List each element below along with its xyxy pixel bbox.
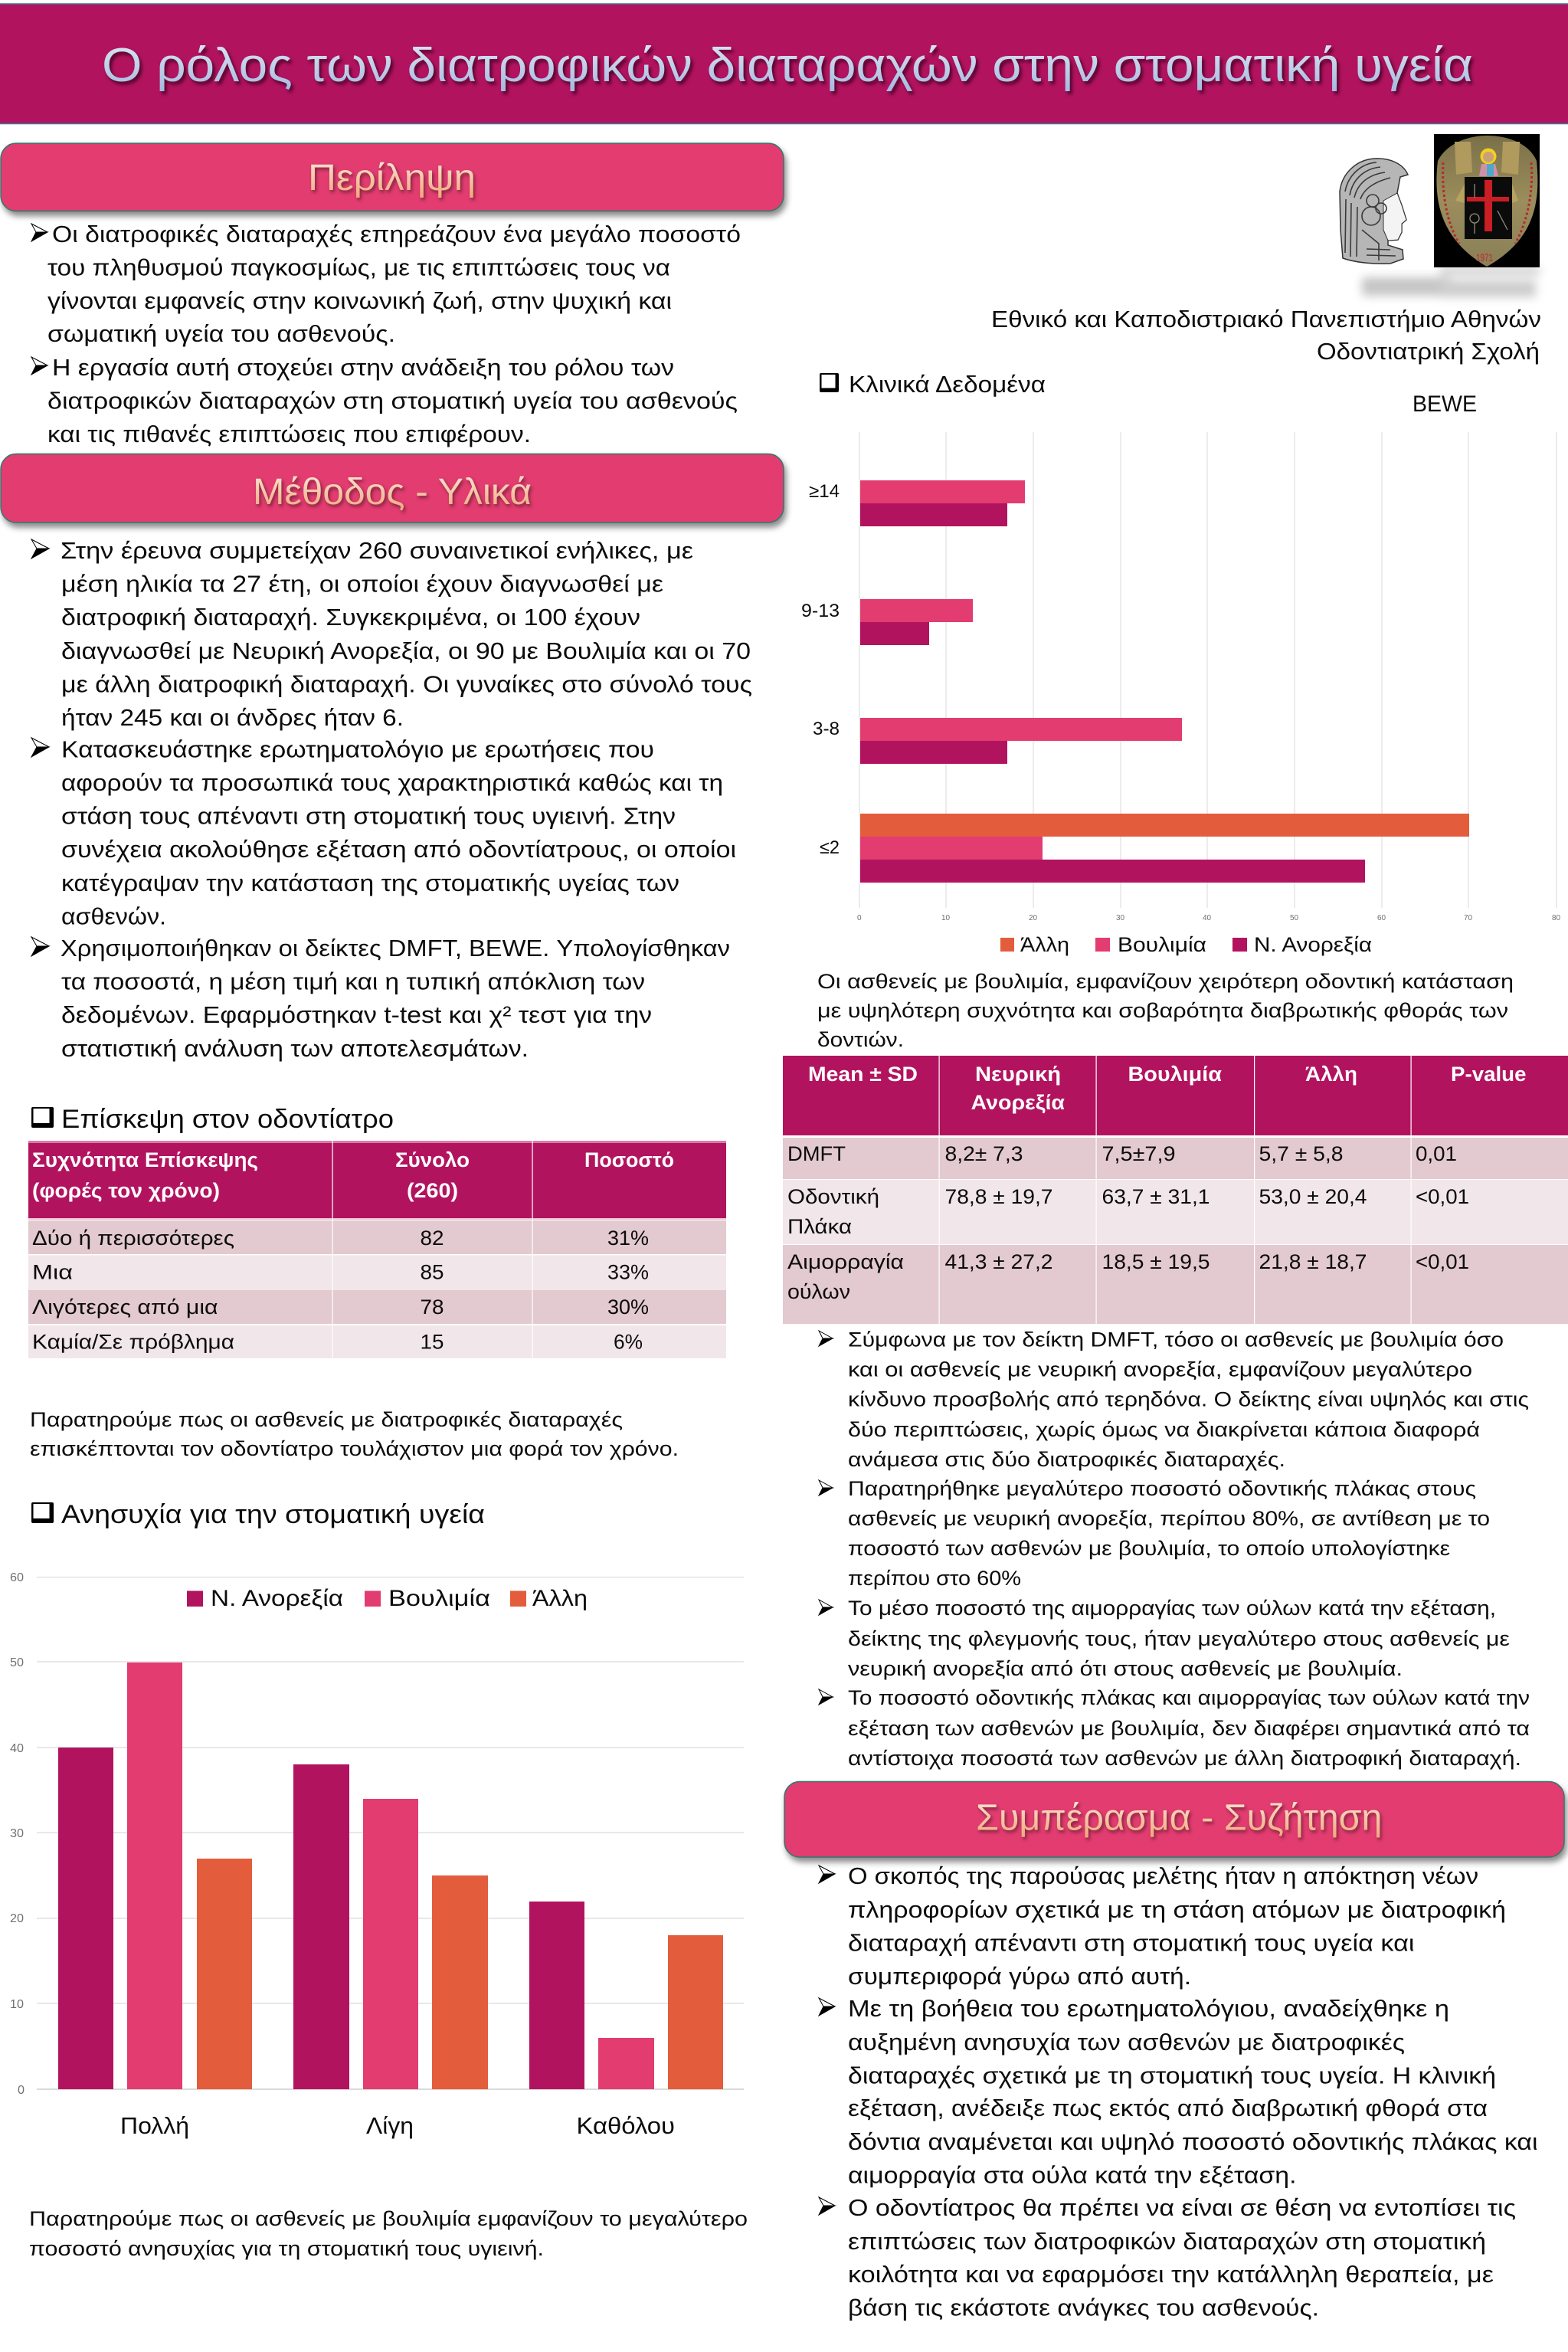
icon: bullet arrow xyxy=(819,1998,835,2016)
icon: bullet arrow xyxy=(31,539,49,559)
title: Ο ρόλος των διατροφικών διαταραχών στην στοματική υγεία xyxy=(102,39,1473,92)
text block: methods: τα ποσοστά, η μέση τιμή και η τυπική απόκλιση των xyxy=(61,968,645,994)
text block: university: Οδοντιατρική Σχολή xyxy=(1317,338,1540,365)
table: clinical indices xyxy=(783,1056,1568,1324)
category labels: ≥14 xyxy=(809,481,840,502)
text block: methods: μέση ηλικία τα 27 έτη, οι οποίοι έχουν διαγνωσθεί με xyxy=(61,570,663,598)
x axis labels: 60 xyxy=(1377,914,1386,922)
table rows: 8,2± 7,3 xyxy=(945,1142,1023,1165)
table rows: 18,5 ± 19,5 xyxy=(1102,1250,1210,1273)
table rows: DMFT xyxy=(787,1142,846,1165)
text block: concern note: ποσοστό ανησυχίας για τη στοματική τους υγιεινή. xyxy=(29,2237,544,2260)
text block: conclusion: πληροφορίων σχετικά με τη στάση ατόμων με διατροφική xyxy=(848,1896,1506,1923)
text block: conclusion: κοιλότητα και να εφαρμόσει την κατάλληλη θεραπεία, με xyxy=(848,2261,1494,2288)
text block: abstract: του πληθυσμού παγκοσμίως, με τις επιπτώσεις τους να xyxy=(47,254,670,280)
text block: clinical findings xyxy=(819,1328,1530,1770)
table header: Βουλιμία xyxy=(1128,1063,1222,1086)
y axis labels: 0 xyxy=(18,2084,25,2097)
bar chart: oral health concern xyxy=(10,1571,744,2139)
table rows: 85 xyxy=(420,1261,444,1284)
legend: Βουλιμία xyxy=(388,1586,490,1611)
table rows: Δύο ή περισσότερες xyxy=(32,1227,234,1250)
table header: Ανορεξία xyxy=(971,1091,1065,1114)
text block: BEWE note: δοντιών. xyxy=(817,1028,904,1051)
text block: clinical findings: κίνδυνο προσβολής από τερηδόνα. Ο δείκτης είναι υψηλός και στις xyxy=(848,1388,1529,1411)
icon: bullet arrow xyxy=(819,1866,835,1883)
table rows: <0,01 xyxy=(1416,1250,1469,1273)
table header: Mean ± SD xyxy=(808,1063,918,1086)
text block: clinical findings: και οι ασθενείς με νευρική ανορεξία, εμφανίζουν μεγαλύτερο xyxy=(848,1358,1472,1381)
y axis labels: 10 xyxy=(10,1998,24,2011)
text block: dentist visit note: επισκέπτονται τον οδοντίατρο τουλάχιστον μια φορά τον χρόνο. xyxy=(30,1437,679,1460)
panel: abstract heading xyxy=(1,143,784,211)
text block: methods: διατροφική διαταραχή. Συγκεκριμένα, οι 100 έχουν xyxy=(61,604,640,631)
table rows: ούλων xyxy=(787,1280,850,1303)
bar chart: BEWE xyxy=(801,432,1561,956)
table header: (φορές τον χρόνο) xyxy=(32,1179,220,1202)
text block: dentist visit note: Παρατηρούμε πως οι ασθενείς με διατροφικές διαταραχές xyxy=(30,1408,623,1431)
text block: methods: στατιστική ανάλυση των αποτελεσμάτων. xyxy=(61,1035,529,1062)
text block: university xyxy=(991,306,1541,365)
text block: methods: στάση τους απέναντι στη στοματική τους υγιεινή. Στην xyxy=(61,803,676,829)
y axis labels: 60 xyxy=(10,1571,24,1584)
table header: Συχνότητα Επίσκεψης xyxy=(32,1148,258,1171)
logo: dental school shield: 1971 xyxy=(1476,251,1493,264)
title banner xyxy=(0,4,1568,124)
x axis labels: 50 xyxy=(1290,914,1299,922)
text block: clinical findings: δείκτης της φλεγμονής τους, ήταν μεγαλύτερο στους ασθενείς με xyxy=(848,1627,1510,1650)
category labels: Πολλή xyxy=(120,2112,189,2139)
text block: abstract xyxy=(31,221,741,447)
panel: conclusion heading xyxy=(784,1782,1564,1857)
text block: clinical findings: Το ποσοστό οδοντικής πλάκας και αιμορραγίας των ούλων κατά την xyxy=(848,1686,1530,1709)
text block: methods: αφορούν τα προσωπικά τους χαρακτηριστικά καθώς και τη xyxy=(61,769,723,796)
text block: methods: ασθενών. xyxy=(61,902,166,930)
legend: Άλλη xyxy=(1020,933,1069,956)
table rows: Οδοντική xyxy=(787,1185,879,1208)
bars: 9-13 xyxy=(860,599,973,645)
x axis labels: 70 xyxy=(1464,914,1473,922)
x axis labels: 40 xyxy=(1203,914,1212,922)
y axis labels xyxy=(10,1571,25,2097)
panel: methods heading: Μέθοδος - Υλικά xyxy=(253,472,532,513)
text block: conclusion: αιμορραγία στα ούλα κατά την εξέταση. xyxy=(848,2162,1296,2188)
x axis labels: 80 xyxy=(1552,914,1561,922)
text block: methods xyxy=(31,537,752,1062)
legend: Ν. Ανορεξία xyxy=(1254,933,1372,956)
table rows: 63,7 ± 31,1 xyxy=(1102,1185,1210,1208)
category labels: Καθόλου xyxy=(576,2112,675,2139)
text block: clinical findings: αντίστοιχα ποσοστά των ασθενών με άλλη διατροφική διαταραχή. xyxy=(848,1747,1521,1770)
category labels: 9-13 xyxy=(801,601,840,621)
category labels xyxy=(120,2112,675,2139)
icon: bullet arrow xyxy=(819,1689,833,1705)
text block: clinical findings: ασθενείς με νευρική ανορεξία, περίπου 80%, σε αντίθεση με το xyxy=(848,1507,1490,1530)
bars: ≥14 xyxy=(860,480,1025,526)
table rows: 0,01 xyxy=(1416,1142,1457,1165)
icon: checkbox xyxy=(820,373,839,392)
legend xyxy=(1000,933,1372,956)
bars: Λίγη xyxy=(293,1764,488,2089)
text block: conclusion xyxy=(819,1862,1538,2321)
table rows: Μια xyxy=(32,1261,73,1284)
table rows xyxy=(787,1142,1469,1303)
text block: clinical findings: ποσοστό των ασθενών με βουλιμία, το οποίο υπολογίστηκε xyxy=(848,1537,1450,1560)
x axis labels: 20 xyxy=(1029,914,1038,922)
table header: Νευρική xyxy=(975,1063,1061,1086)
text block: conclusion: Ο σκοπός της παρούσας μελέτης ήταν η απόκτηση νέων xyxy=(848,1862,1478,1889)
table: visit frequency xyxy=(28,1141,726,1358)
chart title: BEWE: BEWE xyxy=(1413,391,1477,417)
text block: conclusion: εξέταση, ανέδειξε πως εκτός από διαβρωτική φθορά στα xyxy=(848,2095,1488,2121)
y axis labels: 50 xyxy=(10,1656,24,1669)
table header xyxy=(808,1063,1526,1114)
category labels: 3-8 xyxy=(813,719,840,739)
x axis labels: 30 xyxy=(1116,914,1125,922)
text block: methods: δεδομένων. Εφαρμόστηκαν t-test και χ² τεστ για την xyxy=(61,1001,652,1028)
table header: Σύνολο xyxy=(395,1148,470,1171)
panel: methods heading xyxy=(1,454,784,522)
icon: bullet arrow xyxy=(31,357,47,375)
panel: conclusion heading: Συμπέρασμα - Συζήτηση xyxy=(976,1797,1382,1839)
legend: Ν. Ανορεξία xyxy=(211,1586,343,1611)
table rows xyxy=(32,1227,649,1353)
text block: clinical findings: ανάμεσα στις δύο διατροφικές διαταραχές. xyxy=(848,1448,1285,1471)
category labels xyxy=(801,481,840,858)
logo: dental school shield xyxy=(1434,134,1540,267)
x axis labels: 10 xyxy=(941,914,951,922)
table header xyxy=(32,1148,674,1202)
bars: 3-8 xyxy=(860,718,1182,764)
y axis labels: 40 xyxy=(10,1742,24,1755)
icon: bullet arrow xyxy=(819,1600,833,1615)
table rows: 78,8 ± 19,7 xyxy=(945,1185,1052,1208)
icon: bullet arrow xyxy=(31,224,47,241)
text block: BEWE note: Οι ασθενείς με βουλιμία, εμφανίζουν χειρότερη οδοντική κατάσταση xyxy=(817,970,1514,993)
icon: bullet arrow xyxy=(31,738,49,757)
text block: clinical findings: Σύμφωνα με τον δείκτη DMFT, τόσο οι ασθενείς με βουλιμία όσο xyxy=(848,1328,1504,1351)
text block: methods: με άλλη διατροφική διαταραχή. Οι γυναίκες στο σύνολό τους xyxy=(61,671,752,697)
legend: Βουλιμία xyxy=(1118,933,1206,956)
table rows: 78 xyxy=(420,1296,444,1318)
text block: clinical findings: Το μέσο ποσοστό της αιμορραγίας των ούλων κατά την εξέταση, xyxy=(848,1597,1496,1620)
panel: abstract heading: Περίληψη xyxy=(308,158,476,198)
text block: abstract: Οι διατροφικές διαταραχές επηρεάζουν ένα μεγάλο ποσοστό xyxy=(52,221,741,247)
text block: methods: Στην έρευνα συμμετείχαν 260 συναινετικοί ενήλικες, με xyxy=(61,537,693,564)
text block: conclusion: Ο οδοντίατρος θα πρέπει να είναι σε θέση να εντοπίσει τις xyxy=(848,2194,1516,2221)
heading: dentist visit: Επίσκεψη στον οδοντίατρο xyxy=(61,1105,394,1134)
bars: Πολλή xyxy=(58,1662,252,2089)
text block: methods: συνέχεια ακολούθησε εξέταση από οδοντίατρους, οι οποίοι xyxy=(61,836,736,863)
text block: abstract: και τις πιθανές επιπτώσεις που επιφέρουν. xyxy=(47,421,531,447)
text block: conclusion: συμπεριφορά γύρω από αυτή. xyxy=(848,1963,1191,1990)
text block: clinical findings: νευρική ανορεξία από ότι στους ασθενείς με βουλιμία. xyxy=(848,1657,1403,1680)
icon: bullet arrow xyxy=(31,937,49,956)
text block: abstract: σωματική υγεία του ασθενούς. xyxy=(47,320,395,347)
logo: reflection xyxy=(1362,267,1540,297)
legend xyxy=(187,1586,588,1611)
text block: BEWE note xyxy=(817,970,1514,1051)
text block: conclusion: Με τη βοήθεια του ερωτηματολόγιου, αναδείχθηκε η xyxy=(848,1995,1449,2022)
text block: dentist visit note xyxy=(30,1408,679,1460)
text block: clinical findings: δύο περιπτώσεις, χωρίς όμως να διακρίνεται κάποια διαφορά xyxy=(848,1418,1480,1441)
text block: abstract: Η εργασία αυτή στοχεύει στην ανάδειξη του ρόλου των xyxy=(52,354,674,381)
text block: conclusion: διαταραχή απέναντι στη στοματική τους υγεία και xyxy=(848,1929,1415,1957)
table rows: 53,0 ± 20,4 xyxy=(1259,1185,1367,1208)
text block: abstract: διατροφικών διαταραχών στη στοματική υγεία του ασθενούς xyxy=(47,388,738,414)
text block: concern note: Παρατηρούμε πως οι ασθενείς με βουλιμία εμφανίζουν το μεγαλύτερο xyxy=(29,2207,748,2230)
table rows: 33% xyxy=(607,1261,649,1284)
heading: oral health concern: Ανησυχία για την στοματική υγεία xyxy=(61,1500,485,1529)
table rows: 15 xyxy=(420,1330,444,1353)
legend: Άλλη xyxy=(532,1586,588,1611)
text block: conclusion: δόντια αναμένεται και υψηλό ποσοστό οδοντικής πλάκας και xyxy=(848,2128,1538,2155)
category labels: Λίγη xyxy=(366,2112,414,2139)
bars: Καθόλου xyxy=(529,1902,723,2089)
table rows: Αιμορραγία xyxy=(787,1250,904,1273)
text block: conclusion: επιπτώσεις των διατροφικών διαταραχών στη στοματική xyxy=(848,2228,1486,2255)
table header: P-value xyxy=(1451,1063,1526,1086)
text block: conclusion: αυξημένη ανησυχία των ασθενών με διατροφικές xyxy=(848,2029,1405,2056)
text block: concern note xyxy=(29,2207,748,2260)
text block: methods: κατέγραψαν την κατάσταση της στοματικής υγείας των xyxy=(61,870,679,896)
table rows: 31% xyxy=(607,1227,649,1250)
table rows: 6% xyxy=(614,1330,643,1353)
table rows: Καμία/Σε πρόβλημα xyxy=(32,1330,234,1353)
category labels: ≤2 xyxy=(820,837,840,858)
icon: checkbox xyxy=(31,1502,54,1523)
text block: conclusion: διαταραχές σχετικά με τη στοματική τους υγεία. Η κλινική xyxy=(848,2062,1496,2088)
icon: bullet arrow xyxy=(819,1480,833,1495)
x axis labels: 0 xyxy=(857,914,862,922)
text block: abstract: γίνονται εμφανείς στην κοινωνική ζωή, στην ψυχική και xyxy=(47,287,672,314)
icon: bullet arrow xyxy=(819,2197,835,2215)
text block: methods: ήταν 245 και οι άνδρες ήταν 6. xyxy=(61,704,404,731)
table rows: 5,7 ± 5,8 xyxy=(1259,1142,1344,1165)
text block: conclusion: βάση τις εκάστοτε ανάγκες του ασθενούς. xyxy=(848,2294,1319,2321)
table header: (260) xyxy=(407,1179,458,1202)
table rows: Πλάκα xyxy=(787,1215,852,1238)
x axis labels xyxy=(857,914,1561,922)
icon: bullet arrow xyxy=(819,1331,833,1346)
text block: clinical findings: εξέταση των ασθενών με βουλιμία, δεν διαφέρει σημαντικά από τα xyxy=(848,1717,1530,1740)
table header: Άλλη xyxy=(1305,1063,1357,1086)
table header: Ποσοστό xyxy=(584,1148,674,1171)
logo: Athena head xyxy=(1340,159,1408,264)
table rows: 41,3 ± 27,2 xyxy=(945,1250,1052,1273)
bars: ≤2 xyxy=(860,814,1469,883)
text block: methods: Κατασκευάστηκε ερωτηματολόγιο με ερωτήσεις που xyxy=(61,735,654,763)
text block: clinical findings: περίπου στο 60% xyxy=(848,1567,1021,1590)
icon: checkbox xyxy=(31,1107,54,1128)
y axis labels: 30 xyxy=(10,1827,24,1840)
text block: methods: Χρησιμοποιήθηκαν οι δείκτες DMFT, BEWE. Υπολογίσθηκαν xyxy=(61,935,730,961)
table rows: <0,01 xyxy=(1416,1185,1469,1208)
text block: BEWE note: με υψηλότερη συχνότητα και σοβαρότητα διαβρωτικής φθοράς των xyxy=(817,999,1508,1022)
table rows: 21,8 ± 18,7 xyxy=(1259,1250,1367,1273)
table rows: 82 xyxy=(420,1227,444,1250)
table rows: 30% xyxy=(607,1296,649,1318)
text block: university: Εθνικό και Καποδιστριακό Πανεπιστήμιο Αθηνών xyxy=(991,306,1541,332)
y axis labels: 20 xyxy=(10,1912,24,1925)
text block: methods: διαγνωσθεί με Νευρική Ανορεξία, οι 90 με Βουλιμία και οι 70 xyxy=(61,637,751,664)
table rows: Λιγότερες από μια xyxy=(32,1296,218,1318)
heading: clinical data: Κλινικά Δεδομένα xyxy=(849,371,1046,398)
table rows: 7,5±7,9 xyxy=(1102,1142,1175,1165)
text block: clinical findings: Παρατηρήθηκε μεγαλύτερο ποσοστό οδοντικής πλάκας στους xyxy=(848,1477,1476,1500)
